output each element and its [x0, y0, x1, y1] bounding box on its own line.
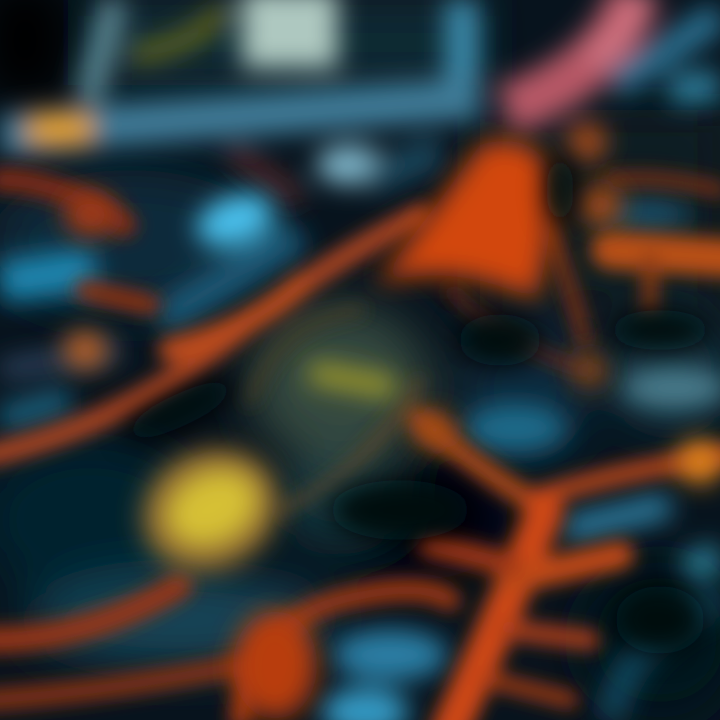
top structures — [0, 0, 720, 200]
blue accents — [0, 184, 720, 720]
dark gaps — [119, 155, 710, 654]
yellow highlights — [153, 372, 395, 561]
orange network — [0, 179, 720, 720]
orange hot spots — [63, 141, 720, 719]
